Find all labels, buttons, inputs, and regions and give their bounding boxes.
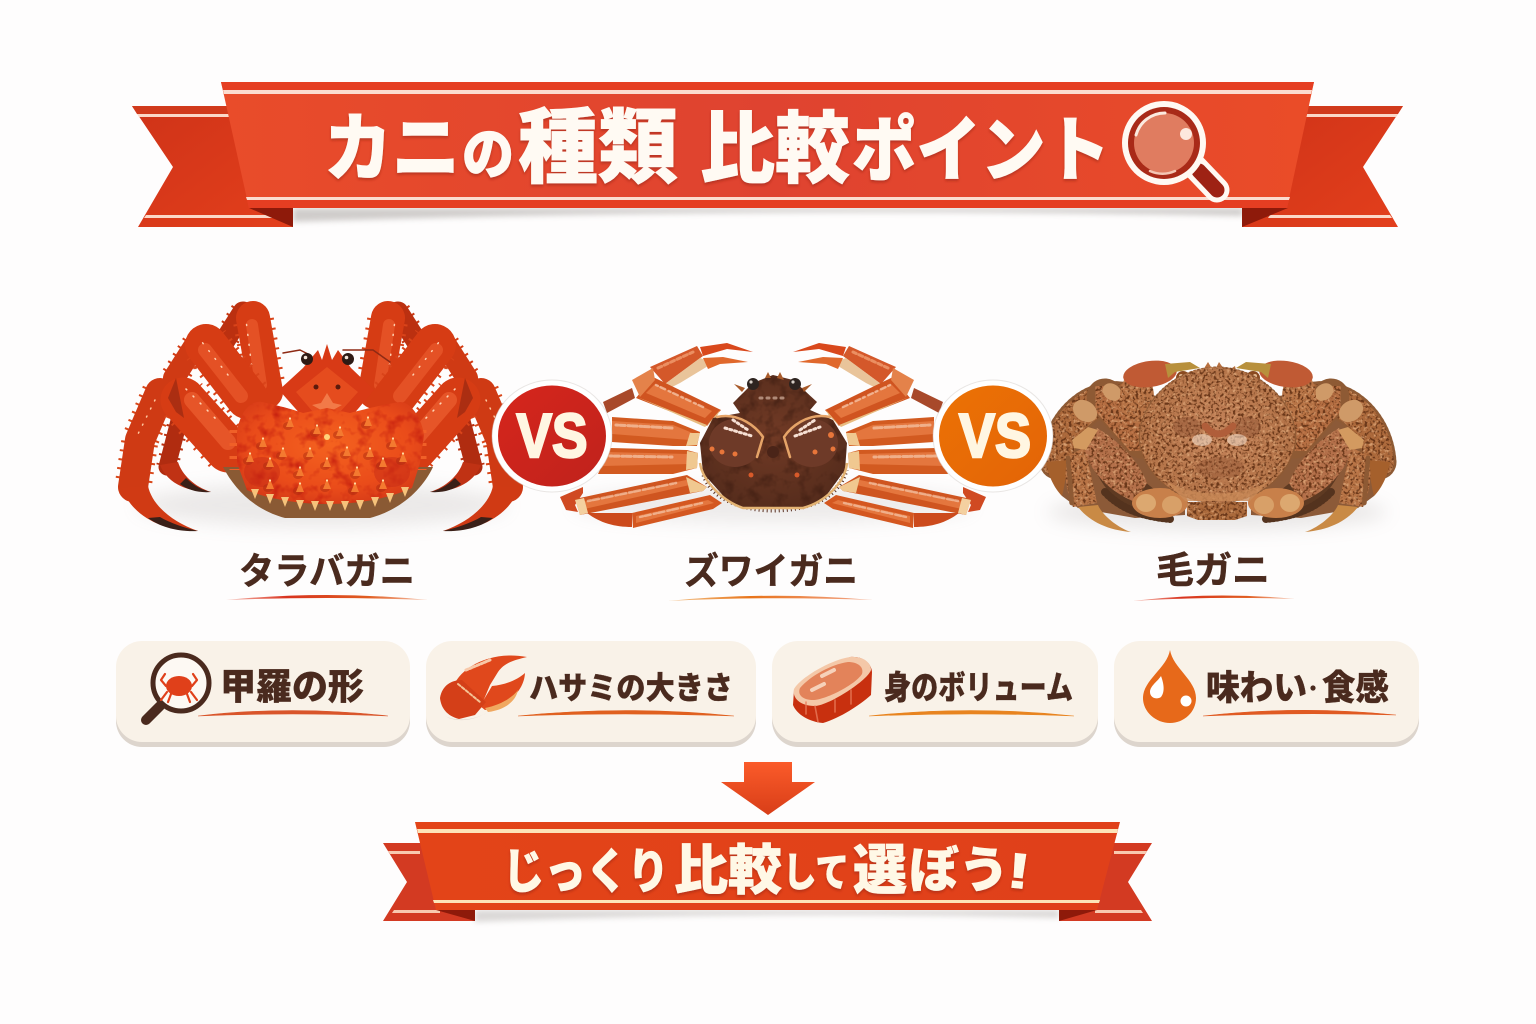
carapace [700,372,847,510]
VS badge: red [492,380,612,492]
left legs [122,312,266,531]
VS badge: orange [933,380,1053,492]
banner text: ぼう [909,844,1009,898]
card text [1206,669,1389,708]
card text: 味わい [1206,669,1307,708]
icon: crab meat [793,657,872,723]
fold shadows [249,208,293,227]
banner text: じっくり [503,846,669,899]
icon: crab claw [440,655,527,720]
carapace [1140,362,1295,503]
title text: カニ [324,107,460,190]
left tail [383,843,475,921]
crab: hairy crab (毛ガニ) [1046,357,1390,532]
title text [324,103,1110,194]
card text: 食感 [1322,669,1389,708]
card: 甲羅の形 [116,641,410,747]
banner text: して [783,851,849,895]
VS badge: orange: VS [959,402,1031,471]
icon: magnifier with crab [146,655,209,720]
label: タラバガニ: タラバガニ [239,551,415,592]
label: ズワイガニ: ズワイガニ [684,551,858,592]
icon: magnifying glass [1122,101,1217,190]
crab: snow crab (ズワイガニ) [560,343,986,528]
card: 味わい・食感 [1114,641,1419,747]
left ribbon tail [132,106,293,227]
banner shadow [475,910,1059,922]
head [279,344,390,418]
banner text: ! [1004,842,1034,900]
left legs and claws [1046,357,1200,532]
title text: 種類 [518,103,678,194]
main ribbon band [221,82,1314,208]
banner text: 比較 [674,841,782,901]
right legs [793,343,986,528]
banner text: 選 [853,841,907,901]
VS badge: red: VS [516,402,588,471]
arrow [721,762,815,815]
left legs [560,343,753,528]
card: ハサミの大きさ [426,641,756,747]
title text: 比較 [700,105,850,193]
card: 甲羅の形: 甲羅の形 [220,666,364,707]
card: 身のボリューム [772,641,1098,747]
abdomen [1187,502,1247,520]
ground shadow [573,487,973,523]
title text: の [462,123,514,186]
right legs [375,312,519,531]
title text: ポイント [852,112,1110,191]
right tail [1059,843,1152,921]
icon: drop [1143,650,1196,723]
main band [415,822,1120,910]
banner drop shadow [293,208,1243,222]
title banner [132,82,1403,227]
underside [223,467,433,518]
conclusion banner [383,822,1152,922]
label: 毛ガニ: 毛ガニ [1156,550,1270,591]
banner text [503,841,1034,901]
label: 毛ガニ [1133,550,1295,601]
crab: king crab (タラバガニ) [122,312,519,531]
card: ハサミの大きさ: ハサミの大きさ [529,671,733,706]
right ribbon tail [1242,106,1403,227]
folds [436,910,475,921]
carapace [236,402,424,511]
eyes [747,378,801,390]
ground shadow [1047,494,1387,530]
right legs and claws [1236,357,1390,532]
ground shadow [137,483,507,527]
card: 身のボリューム: 身のボリューム [884,669,1073,706]
